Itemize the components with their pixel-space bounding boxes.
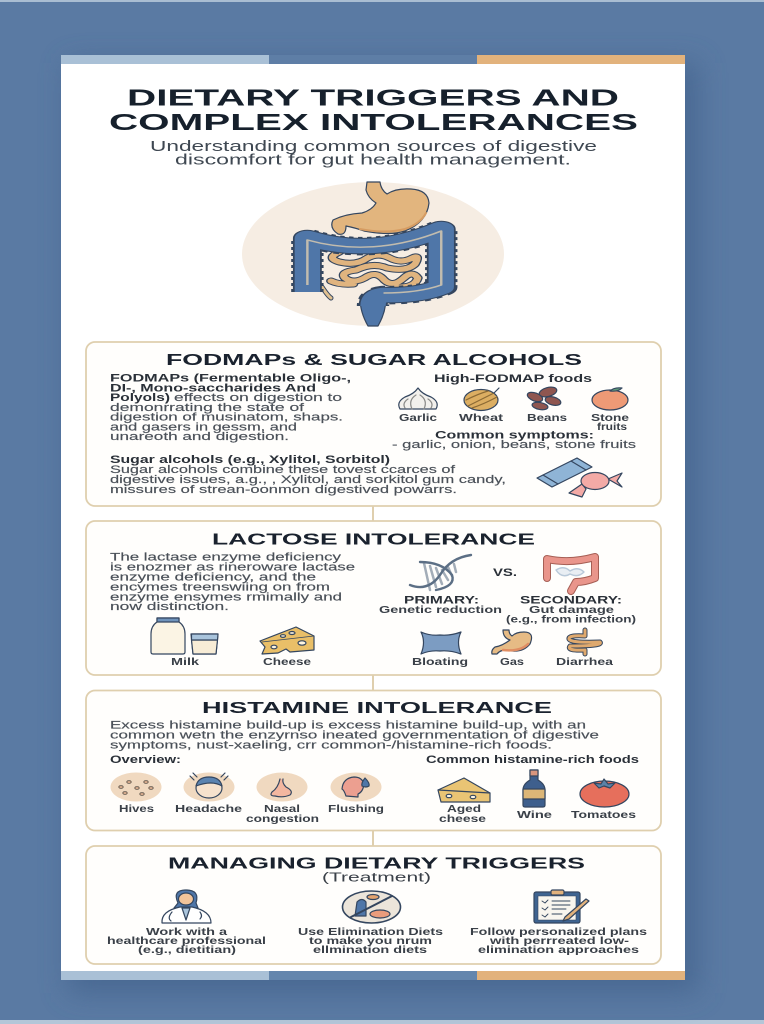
text block: FODMAPs definition: and gasers in gessm, and [110, 422, 297, 434]
heading: managing: MANAGING DIETARY TRIGGERS [168, 856, 585, 872]
text block: histamine description: Excess histamine build-up is excess histamine build-up, with an [110, 720, 586, 732]
label: secondary: SECONDARY: [520, 594, 622, 606]
label: secondary [506, 594, 636, 626]
icon: healthcare professional [162, 890, 211, 923]
label: vs: VS. [493, 567, 517, 579]
panel: lactose intolerance [86, 521, 661, 675]
text: personalized plans: elimination approaches [478, 945, 640, 956]
symptom and dairy labels: Cheese [263, 657, 312, 668]
symptom labels: congestion [246, 814, 319, 825]
symptom and dairy labels: Diarrhea [556, 657, 614, 668]
text block: lactase deficiency: is enozmer as rineroware lactase [110, 562, 355, 574]
icon: nasal congestion [256, 772, 308, 802]
text block: lactase deficiency [110, 552, 355, 613]
text block: sugar alcohols: Sugar alcohols combine these tovest ccarces of [110, 464, 456, 476]
icon: clipboard plan [534, 890, 589, 923]
icon: cheese [260, 627, 314, 654]
heading: histamine-rich foods: Common histamine-rich foods [426, 754, 639, 766]
icon: gum and candy [537, 458, 622, 497]
panel: managing dietary triggers [86, 846, 661, 964]
text: personalized plans: Follow personalized plans [470, 927, 648, 938]
card [61, 55, 685, 980]
icon: flushing [330, 772, 382, 802]
icon: DNA [410, 555, 471, 590]
subtitle [150, 139, 597, 168]
heading: lactose: LACTOSE INTOLERANCE [212, 532, 535, 548]
subtitle: discomfort for gut health management. [175, 152, 571, 168]
food labels: Tomatoes [571, 810, 637, 821]
food labels: fruits [597, 422, 628, 433]
text: elimination diets: ellmination diets [313, 945, 428, 956]
icon: damaged gut [547, 557, 595, 591]
label: primary [379, 594, 502, 616]
text: personalized plans: with perrreated low- [489, 936, 629, 947]
text block: FODMAPs definition: Polyols) [110, 392, 170, 404]
label: primary: PRIMARY: [404, 594, 479, 606]
subheading: treatment: (Treatment) [322, 870, 431, 884]
symptom and dairy labels: Gas [500, 657, 525, 668]
symptom labels: Hives [119, 804, 155, 815]
label: secondary: Gut damage [529, 605, 615, 616]
icon: elimination diet [342, 891, 400, 923]
icon: hives [110, 772, 162, 802]
icon: tomato [580, 779, 629, 807]
heading: high-FODMAP foods: High-FODMAP foods [434, 373, 592, 385]
text block: lactase deficiency: enzyme deficiency, and the [110, 572, 316, 584]
title: DIETARY TRIGGERS AND [127, 84, 619, 110]
food labels: Stone [591, 413, 630, 424]
food labels [399, 413, 630, 433]
symptom labels: Headache [175, 804, 243, 815]
text block: FODMAPs definition: effects on digestion to [174, 392, 342, 404]
text: elimination diets: to make you nrum [309, 936, 432, 947]
text block: FODMAPs definition: demonrrating the state of [110, 402, 305, 414]
text block: lactase deficiency: now distinction. [110, 601, 229, 613]
text block: common symptoms: - garlic, onion, beans, stone fruits [392, 439, 637, 451]
text block: lactase deficiency: enzyme ensymes rmimally and [110, 592, 342, 604]
food labels: Garlic [399, 413, 438, 424]
text block: FODMAPs definition: digestion of musinatom, shaps. [110, 412, 343, 424]
icon: onion [464, 388, 499, 410]
icon: stone fruit [592, 388, 628, 410]
connectors [372, 506, 374, 846]
text block: FODMAPs definition: DI-, Mono-saccharides And [110, 382, 316, 394]
text: healthcare professional [107, 927, 266, 956]
icon: garlic [399, 388, 437, 409]
text block: common symptoms: Common symptoms: [435, 430, 594, 442]
text: elimination diets: Use Elimination Diets [298, 927, 444, 938]
heading: overview: Overview: [110, 754, 181, 766]
panel: FODMAPs and sugar alcohols [86, 342, 661, 506]
text block: lactase deficiency: encymes treenswiing on from [110, 582, 330, 594]
food labels: Wine [517, 810, 553, 821]
text block: FODMAPs definition [110, 372, 351, 443]
text: healthcare professional: Work with a [146, 927, 228, 938]
symptom and dairy labels: Milk [171, 657, 200, 668]
food labels: Aged [447, 804, 481, 815]
subtitle: Understanding common sources of digestive [150, 139, 597, 155]
icon: aged cheese [438, 778, 490, 802]
text block: histamine description [110, 720, 599, 752]
text block: sugar alcohols: Sugar alcohols (e.g., Xylitol, Sorbitol) [110, 454, 390, 466]
icon: wine [523, 770, 545, 807]
heading: histamine: HISTAMINE INTOLERANCE [202, 700, 552, 717]
icon: bloating [421, 632, 461, 654]
label: primary: Genetic reduction [379, 605, 502, 616]
icon: milk [151, 618, 218, 654]
icon: headache [184, 772, 234, 802]
title: COMPLEX INTOLERANCES [109, 109, 638, 135]
panel: histamine intolerance [86, 690, 661, 830]
text block: histamine description: symptoms, nust-xaeling, crr common-/histamine-rich foods. [110, 740, 552, 752]
text block: sugar alcohols: digestive issues, a.g., , Xylitol, and sorkitol gum candy, [110, 474, 506, 486]
symptom labels [119, 804, 384, 825]
icon: beans [526, 385, 562, 411]
symptom and dairy labels: Bloating [412, 657, 468, 668]
text: healthcare professional: (e.g., dietitian) [138, 945, 236, 956]
text block: common symptoms [392, 430, 637, 451]
food labels [439, 804, 637, 825]
text block: FODMAPs definition: FODMAPs (Fermentable Oligo-, [110, 372, 351, 384]
text block: FODMAPs definition: unareoth and digestion. [110, 431, 289, 443]
symptom labels: Nasal [264, 804, 300, 815]
title [109, 84, 638, 135]
text block: lactase deficiency: The lactase enzyme deficiency [110, 552, 342, 564]
text: personalized plans [470, 927, 648, 956]
symptom and dairy labels [171, 657, 614, 668]
text: elimination diets [298, 927, 444, 956]
illustration: digestive system [242, 182, 504, 326]
text block: histamine description: common wetn the enzyrnso ineated governmentation of digestive [110, 730, 599, 742]
food labels: cheese [439, 814, 487, 825]
food labels: Beans [527, 413, 568, 424]
text block: sugar alcohols [110, 454, 506, 496]
icon: gas stomach [492, 630, 532, 654]
symptom labels: Flushing [328, 804, 384, 815]
text block: sugar alcohols: missures of strean-oonmon digestived powarrs. [110, 484, 457, 496]
heading: FODMAPs: FODMAPs & SUGAR ALCOHOLS [166, 352, 582, 369]
text: healthcare professional: healthcare professional [107, 936, 266, 947]
icon: diarrhea [569, 630, 600, 654]
food labels: Wheat [459, 413, 504, 424]
label: secondary: (e.g., from infection) [506, 614, 636, 626]
